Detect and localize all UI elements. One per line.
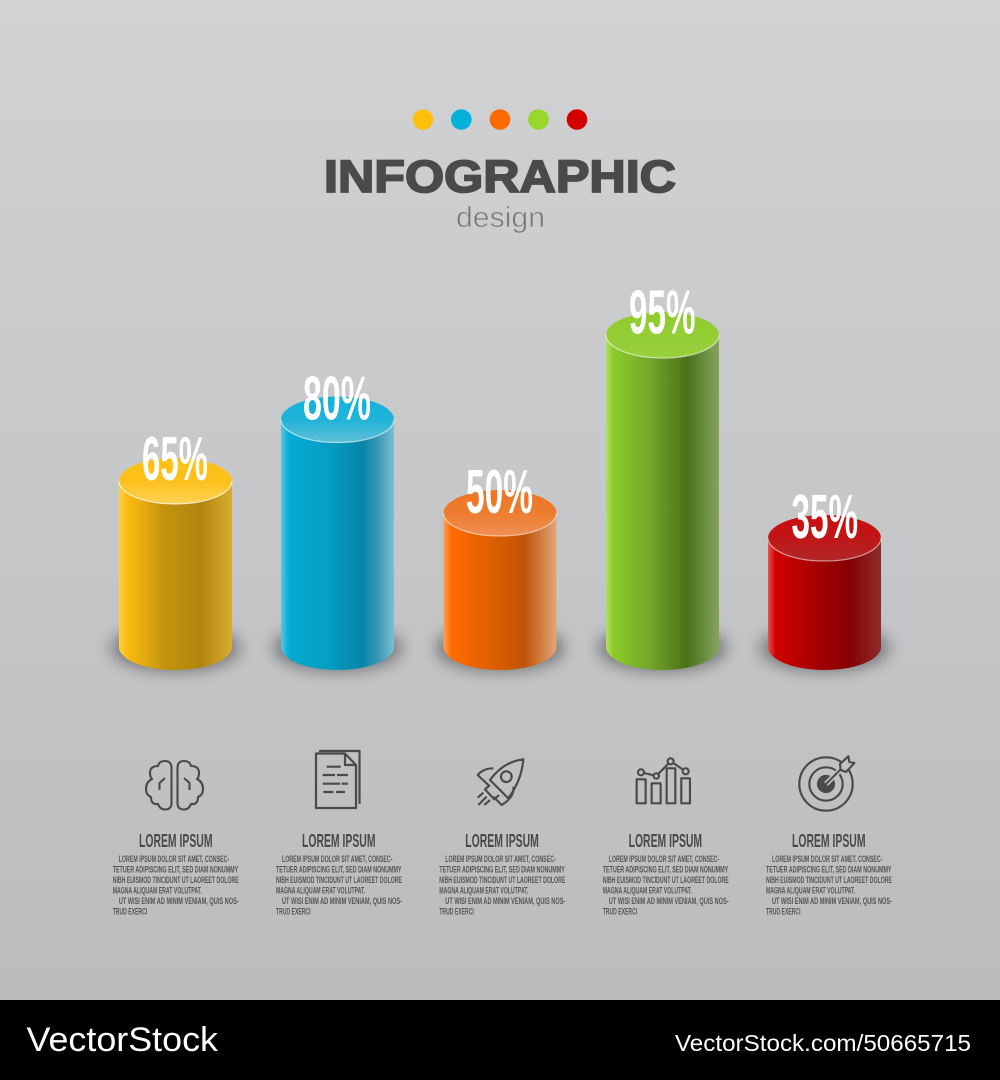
footer url: VectorStock.com/50665715 xyxy=(675,1030,971,1056)
body text: LOREM IPSUM DOLOR SIT AMET, CONSEC- xyxy=(282,854,392,865)
body text: LOREM IPSUM DOLOR SIT AMET, CONSEC- xyxy=(119,854,229,865)
heading: LOREM IPSUM xyxy=(302,831,376,851)
cylinder: 50% orange xyxy=(436,458,564,671)
body text: UT WISI ENIM AD MINIM VENIAM, QUIS NOS- xyxy=(445,896,565,907)
cylinder: 35% red: 35% xyxy=(792,483,858,552)
body text: MAGNA ALIQUAM ERAT VOLUTPAT. xyxy=(113,886,202,896)
cylinder: 35% red xyxy=(760,483,888,671)
bar chart: cylinders xyxy=(112,278,888,671)
body text: NIBH EUISMOD TINCIDUNT UT LAOREET DOLORE xyxy=(766,875,892,886)
footer bar xyxy=(0,1000,1000,1080)
icon: growth chart xyxy=(637,758,690,803)
heading: LOREM IPSUM xyxy=(792,831,866,851)
body text: TRUD EXERCI xyxy=(276,906,310,918)
body text: NIBH EUISMOD TINCIDUNT UT LAOREET DOLORE xyxy=(603,875,729,886)
cylinder: 95% green: 95% xyxy=(629,278,696,348)
body text xyxy=(439,854,565,918)
body text: MAGNA ALIQUAM ERAT VOLUTPAT. xyxy=(439,886,528,896)
heading: LOREM IPSUM xyxy=(629,831,702,851)
body text xyxy=(766,854,892,918)
body text: UT WISI ENIM AD MINIM VENIAM, QUIS NOS- xyxy=(772,896,892,907)
cylinder: 50% orange: 50% xyxy=(466,458,533,527)
body text: LOREM IPSUM DOLOR SIT AMET, CONSEC- xyxy=(772,854,882,865)
body text: TRUD EXERCI xyxy=(113,906,147,918)
body text: TETUER ADIPISCING ELIT, SED DIAM NONUMMY xyxy=(603,864,729,876)
body text: TRUD EXERCI xyxy=(439,906,474,918)
body text: MAGNA ALIQUAM ERAT VOLUTPAT. xyxy=(276,886,365,896)
cylinder: 65% yellow: 65% xyxy=(142,425,208,494)
body text: UT WISI ENIM AD MINIM VENIAM, QUIS NOS- xyxy=(609,896,729,907)
body text: TRUD EXERCI xyxy=(603,906,637,918)
body text xyxy=(113,854,239,918)
body text: UT WISI ENIM AD MINIM VENIAM, QUIS NOS- xyxy=(282,896,402,907)
icon: document xyxy=(316,751,360,808)
body text: NIBH EUISMOD TINCIDUNT UT LAOREET DOLORE xyxy=(113,875,239,886)
heading: LOREM IPSUM xyxy=(139,831,212,851)
icon: brain xyxy=(146,761,203,810)
body text: UT WISI ENIM AD MINIM VENIAM, QUIS NOS- xyxy=(119,896,239,907)
body text: TETUER ADIPISCING ELIT, SED DIAM NONUMMY xyxy=(113,864,239,876)
column text 3 xyxy=(439,831,565,918)
body text: NIBH EUISMOD TINCIDUNT UT LAOREET DOLORE xyxy=(276,875,402,886)
column text 2 xyxy=(276,831,402,918)
body text: MAGNA ALIQUAM ERAT VOLUTPAT. xyxy=(603,886,692,896)
body text: MAGNA ALIQUAM ERAT VOLUTPAT. xyxy=(766,886,855,896)
body text: TETUER ADIPISCING ELIT, SED DIAM NONUMMY xyxy=(766,864,892,876)
icon: target xyxy=(799,756,854,811)
body text: TRUD EXERCI xyxy=(766,906,800,918)
cylinder: 80% blue xyxy=(274,364,402,671)
body text: TETUER ADIPISCING ELIT, SED DIAM NONUMMY xyxy=(439,864,565,876)
body text xyxy=(276,854,402,918)
column text 5 xyxy=(766,831,892,918)
cylinder: 95% green xyxy=(598,278,726,671)
body text xyxy=(603,854,729,918)
subtitle: design xyxy=(456,202,545,234)
title: INFOGRAPHIC xyxy=(324,151,676,202)
cylinder: 65% yellow xyxy=(112,425,240,671)
body text: LOREM IPSUM DOLOR SIT AMET, CONSEC- xyxy=(609,854,719,865)
footer logo: VectorStock xyxy=(26,1021,219,1059)
body text: TETUER ADIPISCING ELIT, SED DIAM NONUMMY xyxy=(276,864,402,876)
column text 1 xyxy=(113,831,239,918)
cylinder: 80% blue: 80% xyxy=(303,364,371,434)
icon: rocket xyxy=(478,759,523,805)
body text: LOREM IPSUM DOLOR SIT AMET, CONSEC- xyxy=(445,854,556,865)
heading: LOREM IPSUM xyxy=(465,831,539,851)
body text: NIBH EUISMOD TINCIDUNT UT LAOREET DOLORE xyxy=(439,875,565,886)
column text 4 xyxy=(603,831,729,918)
colour dots xyxy=(413,109,587,130)
